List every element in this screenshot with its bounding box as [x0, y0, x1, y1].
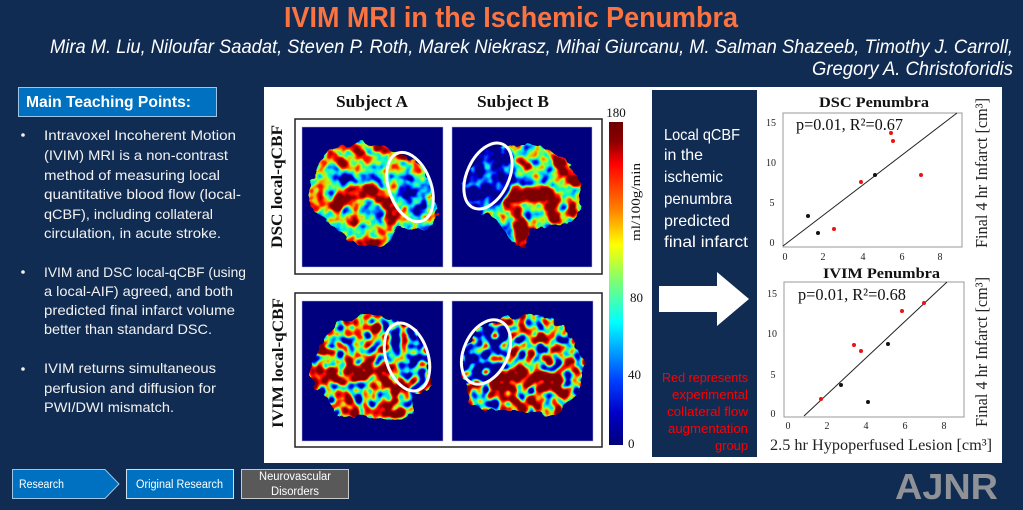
tag: Original Research: Original Research: [136, 479, 223, 491]
text block: simultaneous perfusion: IVIM returns simultaneous: [44, 360, 216, 376]
text block: red legend: experimental: [672, 387, 748, 402]
scatter chart: IVIM penumbra: 5: [770, 370, 776, 381]
authors: [50, 37, 1013, 80]
tag: Neurovascular Disorders: Neurovascular: [259, 471, 331, 483]
scatter chart: DSC penumbra: 8: [938, 252, 942, 263]
authors: Mira M. Liu, Niloufar Saadat, Steven P. Roth, Marek Niekrasz, Mihai Giurcanu, M. Salman Shazeeb, Timothy J. Carroll,: [50, 37, 1013, 58]
scatter chart: IVIM penumbra: 4: [864, 421, 868, 432]
heading: subject A: Subject A: [336, 92, 409, 111]
label: DSC local-qCBF: DSC local-qCBF: [269, 125, 286, 248]
colorbar: ml/100g/min: [628, 162, 643, 241]
scatter chart: IVIM penumbra: 6: [902, 421, 908, 432]
scatter chart: IVIM penumbra: 2.5 hr Hypoperfused Lesion [cm³]: [770, 437, 992, 454]
brain map: DSC subject A: [296, 127, 448, 267]
text block: red legend: collateral flow: [667, 404, 749, 419]
text block: IVIM definition: qCBF), including collateral: [44, 206, 213, 222]
text block: IVIM definition: Intravoxel Incoherent Motion: [44, 127, 236, 143]
brain map: IVIM subject A: [300, 301, 443, 441]
scatter chart: IVIM penumbra: 10: [767, 329, 777, 340]
text block: conclusion: [664, 127, 749, 251]
tag: Research: Research: [19, 479, 64, 491]
scatter chart: DSC penumbra: 0: [770, 238, 774, 249]
text block: conclusion: final infarct: [664, 234, 749, 251]
scatter chart: DSC penumbra: 0: [782, 252, 788, 263]
text block: IVIM definition: method of measuring local: [44, 167, 220, 183]
scatter chart: DSC penumbra: 15: [766, 118, 776, 129]
authors: Gregory A. Christoforidis: [812, 59, 1013, 80]
ellipse: penumbra B: [452, 312, 520, 392]
ellipse: penumbra A: [378, 146, 442, 228]
colorbar: 40: [628, 367, 641, 382]
label: IVIM local-qCBF: IVIM local-qCBF: [270, 298, 287, 428]
scatter chart: DSC penumbra: 5: [770, 198, 774, 209]
text block: red legend: Red represents: [662, 370, 748, 385]
scatter chart: IVIM penumbra: 2: [824, 421, 830, 432]
text block: red legend: augmentation: [668, 421, 748, 436]
text block: IVIM definition: (IVIM) MRI is a non-contrast: [44, 147, 228, 163]
tag: Neurovascular Disorders: Disorders: [271, 486, 319, 498]
text block: simultaneous perfusion: perfusion and diffusion for: [44, 380, 216, 396]
tag: Research: [12, 470, 119, 498]
scatter chart: IVIM penumbra: Final 4 hr Infarct [cm³]: [972, 277, 991, 427]
text block: agreement: IVIM and DSC local-qCBF (using: [44, 264, 246, 280]
text block: agreement: [21, 264, 246, 337]
colorbar: 0: [628, 436, 634, 451]
text block: conclusion: ischemic: [664, 169, 723, 186]
text block: simultaneous perfusion: [21, 360, 216, 415]
text block: agreement: a local-AIF) agreed, and both: [44, 283, 233, 299]
tag: Original Research: [126, 470, 234, 498]
scatter chart: IVIM penumbra: 0: [770, 409, 776, 420]
panel: IVIM brain maps: [295, 293, 602, 447]
brain map: DSC subject B: [449, 127, 592, 267]
logo: AJNR: AJNR: [895, 466, 998, 507]
panel: main teaching points: [18, 88, 246, 415]
text block: IVIM definition: [21, 127, 241, 241]
scatter chart: DSC penumbra: Final 4 hr Infarct [cm³]: [972, 98, 991, 248]
colorbar: [606, 105, 643, 451]
scatter chart: DSC penumbra: DSC Penumbra: [819, 95, 930, 111]
scatter chart: DSC penumbra: 4: [860, 252, 866, 263]
heading: main teaching points: Main Teaching Points:: [26, 94, 191, 111]
scatter chart: DSC penumbra: p=0.01, R²=0.67: [796, 115, 903, 134]
scatter chart: IVIM penumbra: 0: [786, 421, 790, 432]
text block: conclusion: predicted: [664, 213, 730, 230]
heading: subject B: Subject B: [477, 92, 549, 111]
text block: conclusion: Local qCBF: [664, 127, 740, 144]
text block: IVIM definition: quantitative blood flow (local-: [44, 186, 241, 202]
scatter chart: DSC penumbra: 10: [766, 158, 776, 169]
arrow: [659, 272, 749, 326]
ellipse: penumbra B: [454, 135, 522, 217]
text block: red legend: [662, 370, 749, 453]
text block: agreement: predicted final infarct volume: [44, 302, 235, 318]
panel: conclusion: [652, 90, 757, 457]
scatter chart: IVIM penumbra: IVIM Penumbra: [823, 266, 941, 282]
text block: conclusion: penumbra: [664, 191, 732, 208]
scatter chart: IVIM penumbra: 15: [767, 289, 777, 300]
ellipse: penumbra A: [376, 317, 438, 397]
scatter chart: DSC penumbra: 2: [820, 252, 826, 263]
tag: Neurovascular Disorders: [242, 470, 348, 498]
text block: IVIM definition: circulation, in acute stroke.: [44, 225, 221, 241]
heading: main teaching points: [18, 88, 216, 116]
brain map: IVIM subject B: [452, 301, 593, 441]
text block: red legend: group: [715, 438, 748, 453]
scatter chart: IVIM penumbra: [767, 266, 992, 454]
colorbar: 180: [606, 105, 626, 120]
title: IVIM MRI in the Ischemic Penumbra: [284, 2, 739, 34]
scatter chart: DSC penumbra: [766, 95, 991, 263]
text block: agreement: better than standard DSC.: [44, 321, 212, 337]
scatter chart: DSC penumbra: 6: [900, 252, 904, 263]
text block: simultaneous perfusion: PWI/DWI mismatch.: [44, 399, 174, 415]
panel: DSC brain maps: [295, 119, 602, 274]
scatter chart: IVIM penumbra: 8: [942, 421, 946, 432]
panel: figure background: [264, 87, 1002, 463]
colorbar: 80: [630, 290, 643, 305]
scatter chart: IVIM penumbra: p=0.01, R²=0.68: [798, 285, 906, 304]
text block: conclusion: in the: [664, 147, 703, 164]
